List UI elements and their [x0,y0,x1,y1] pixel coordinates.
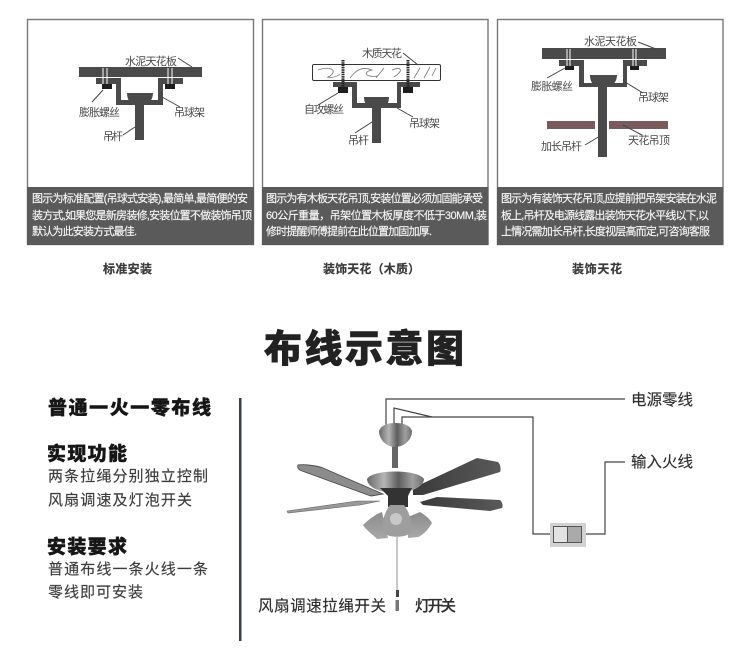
caption: extended rod mount: 上情况需加长吊杆,长度视层高而定,可咨询客服 [501,224,710,238]
diagram: extended rod mount: 加长吊杆 [541,139,582,153]
caption: wood mount: 图示为有木板天花吊顶,安装位置必须加固能承受 [266,191,483,205]
label: light switch: 灯开关 [415,597,456,615]
icon: lamp shades [363,505,432,539]
diagram: extended rod mount: 膨胀螺丝 [531,79,573,93]
caption: standard mount: 默认为此安装方式最佳. [32,224,137,238]
caption: extended rod mount [497,187,723,245]
panel: standard installation [27,20,254,245]
diagram: wood mount [304,47,440,147]
heading: wiring type: 普通一火一零布线 [48,396,211,419]
text: function description: 两条拉绳分别独立控制 [48,468,208,485]
label: standard installation: 标准安装 [103,261,152,276]
diagram: wood mount: 自攻螺丝 [304,102,344,116]
panel: decorative ceiling [497,20,723,245]
label: neutral wire: 电源零线 [631,391,693,409]
icon: motor housing [367,472,424,507]
caption: wood mount: 修时提醒师傅提前在此位置加固加厚. [266,224,432,238]
caption: wood mount [262,187,488,245]
text: requirements description: 普通布线一条火线一条 [48,561,208,578]
diagram: standard mount [79,54,205,143]
label: live wire: 输入火线 [631,453,693,471]
panel: wood ceiling [262,20,488,245]
label: fan pull switch: 风扇调速拉绳开关 [258,597,386,615]
label: decorative ceiling: 装饰天花 [572,261,622,276]
diagram: standard mount: 吊球架 [174,105,205,119]
diagram: wood mount: 木质天花 [362,47,402,60]
caption: standard mount: 图示为标准配置(吊球式安装),最简单,最简便的安 [32,191,248,205]
diagram: standard mount: 吊杆 [103,129,123,143]
text: requirements description [48,561,208,601]
text block: wiring notes [47,396,211,601]
caption: standard mount: 装方式,如果您是新房装修,安装位置不做装饰吊顶 [32,208,252,222]
caption: wood mount: 60公斤重量，吊架位置木板厚度不低于30MM,装 [266,208,487,222]
diagram: standard mount: 膨胀螺丝 [79,105,120,119]
icon: wall switch [550,523,586,547]
text: function description [48,468,208,509]
label: wood ceiling: 装饰天花（木质） [323,261,420,276]
diagram: standard mount: 水泥天花板 [125,54,177,68]
divider line [239,398,242,641]
wiring lines [386,399,625,534]
diagram: extended rod mount [531,34,670,157]
title: 布线示意图 [264,328,464,371]
icon: fan blades [287,458,503,513]
diagram: extended rod mount: 天花吊顶 [628,134,670,147]
icon: pull cords [396,537,399,611]
caption: extended rod mount: 板上,吊杆及电源线露出装饰天花水平线以下,以 [501,208,709,222]
diagram: extended rod mount: 水泥天花板 [584,34,637,48]
icon: canopy and stem [379,423,412,468]
text: function description: 风扇调速及灯泡开关 [48,492,192,509]
text: requirements description: 零线即可安装 [48,584,143,601]
diagram: wood mount: 吊球架 [409,116,440,130]
heading: function: 实现功能 [47,442,127,465]
diagram: extended rod mount: 吊球架 [638,90,669,104]
diagram: wood mount: 吊杆 [348,133,369,147]
caption: extended rod mount: 图示为有装饰天花吊顶,应提前把吊架安装在水泥 [501,191,717,205]
ceiling fan illustration [287,423,503,611]
caption: standard mount [27,187,254,245]
heading: requirements: 安装要求 [47,535,127,558]
